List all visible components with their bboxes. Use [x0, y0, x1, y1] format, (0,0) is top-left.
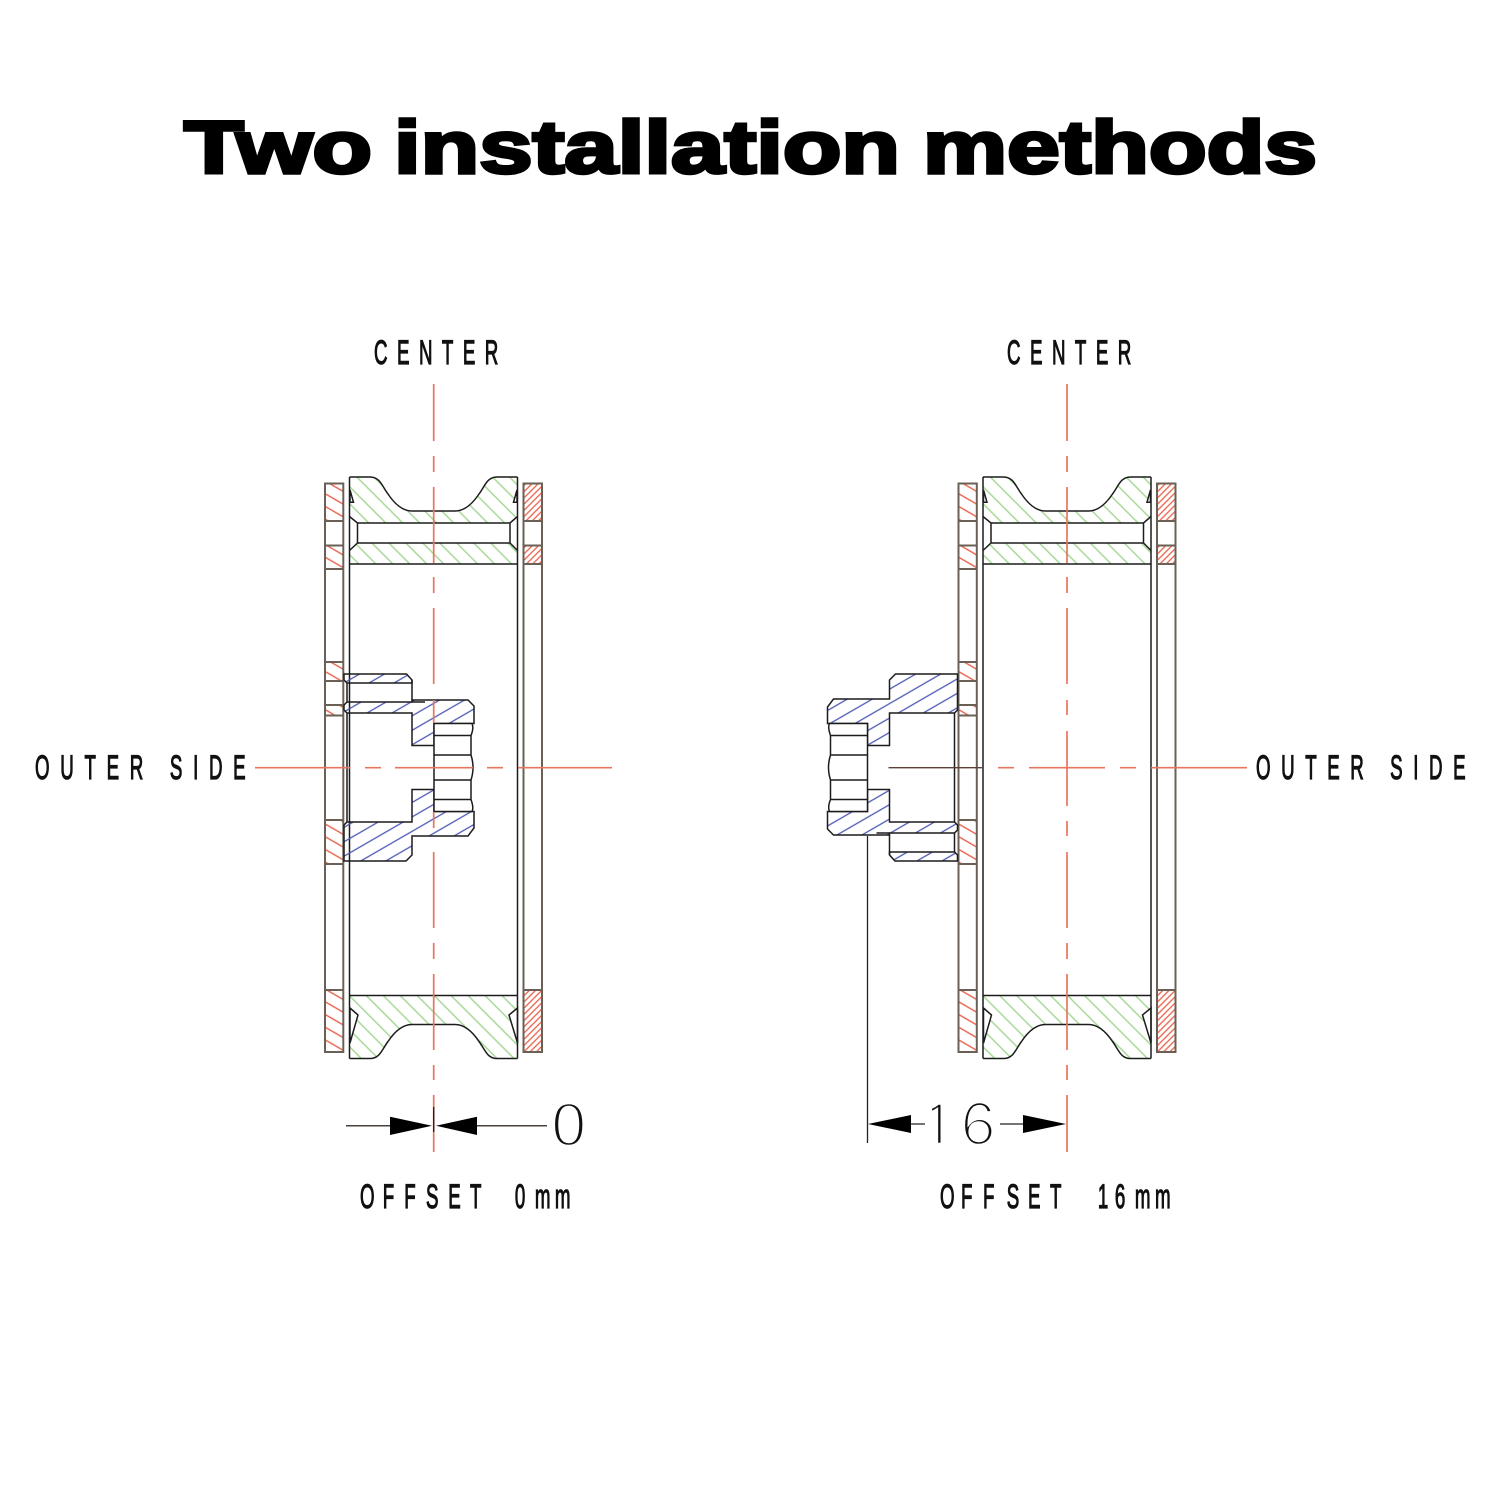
right diagram: wheel section	[958, 477, 1176, 1058]
dimension: offset 16: 1	[924, 1096, 953, 1154]
left centre line	[433, 384, 435, 1152]
left horizontal axis	[255, 767, 612, 769]
label: center right: CENTER	[1007, 333, 1131, 371]
dimension: offset 0: 0	[549, 1098, 588, 1156]
dimension: offset 16	[868, 836, 1066, 1154]
wheel side walls	[350, 477, 518, 1058]
right horizontal axis	[888, 767, 1247, 769]
label: outer side right: OUTER SIDE	[1256, 748, 1466, 786]
left diagram: blue hub	[344, 674, 474, 861]
right plate	[524, 484, 542, 1052]
dimension: offset 16: 6	[960, 1096, 996, 1154]
label: offset 16mm: OFFSET 16mm	[940, 1177, 1171, 1215]
left plate	[325, 484, 343, 1052]
label: center left: CENTER	[374, 333, 498, 371]
left diagram: wheel section	[325, 477, 542, 1058]
rim bottom section	[350, 996, 518, 1058]
right diagram: blue hub	[828, 674, 958, 861]
title	[184, 106, 1317, 189]
label: outer side left: OUTER SIDE	[35, 748, 246, 786]
title: installation	[394, 106, 900, 189]
rim top section	[350, 477, 518, 564]
hex socket	[434, 724, 473, 812]
dimension: offset 0	[346, 1098, 588, 1156]
title: Two	[184, 106, 372, 189]
title: methods	[923, 106, 1317, 189]
right centre line	[1066, 384, 1068, 1152]
label: offset 0mm: OFFSET 0mm	[360, 1177, 570, 1215]
